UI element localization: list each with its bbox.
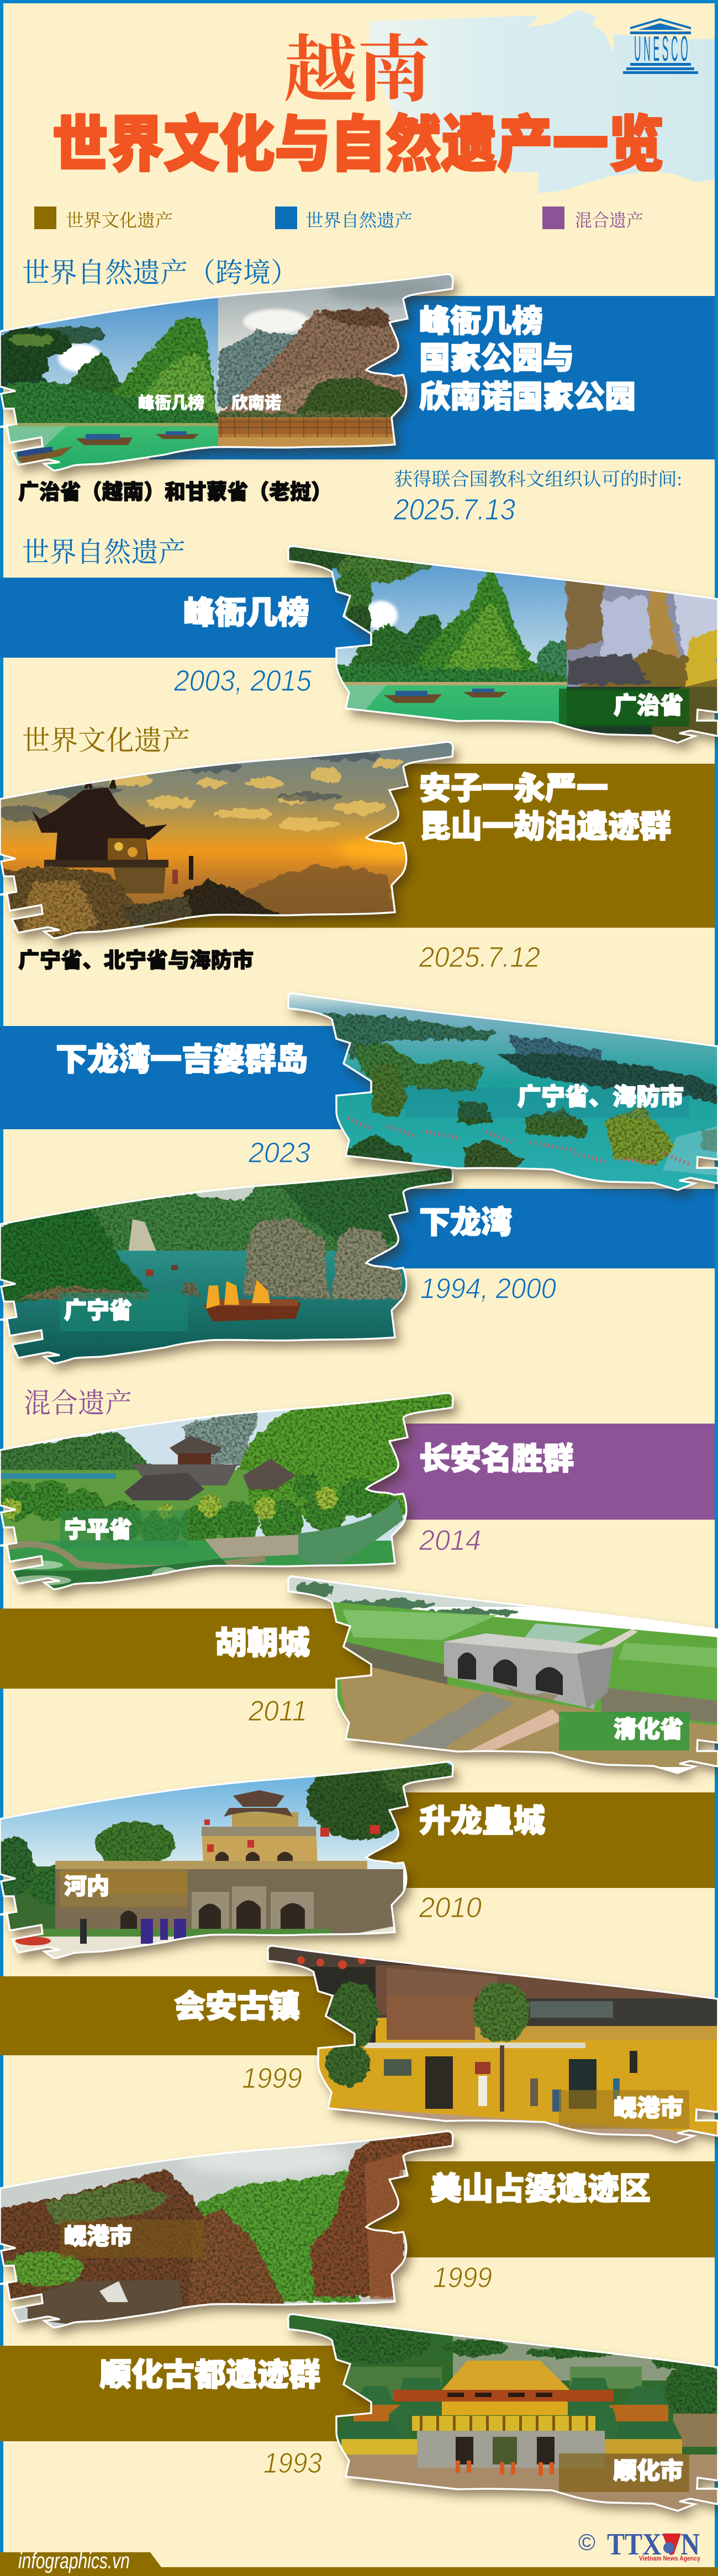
label: Quang Ninh: 广宁省 bbox=[64, 1298, 132, 1323]
label: Quang Ninh, Hai Phong: 广宁省、海防市 bbox=[518, 1084, 684, 1110]
band: purple title band bbox=[353, 1424, 715, 1520]
date: 1993: 1993 bbox=[263, 2447, 322, 2479]
footer bar bbox=[0, 2549, 718, 2576]
photo: aerial of Ha Long and Cat Ba bbox=[284, 991, 718, 1195]
panel: Phong Nha Ke Bang bbox=[0, 544, 718, 748]
band: blue title band bbox=[0, 1026, 381, 1129]
date: 2023: 2023 bbox=[248, 1137, 310, 1169]
band title: Hoi An: 会安古镇 bbox=[174, 1989, 300, 2024]
logo: TTXVN: Vietnam News Agency bbox=[639, 2556, 701, 2562]
band title: Yen Tu: 安子一永严一 bbox=[419, 771, 608, 806]
band title: Phong Nha and Hin Nam No: 国家公园与 bbox=[419, 341, 574, 375]
band title: Trang An: 长安名胜群 bbox=[419, 1441, 574, 1476]
band: brown title band bbox=[0, 1976, 365, 2055]
legend: cultural heritage bbox=[34, 207, 173, 230]
band: brown title band bbox=[353, 1792, 715, 1888]
band title: Yen Tu: 昆山一劫泊遗迹群 bbox=[419, 809, 671, 844]
legend: mixed heritage: 混合遗产 bbox=[575, 210, 643, 230]
photo: Hoi An street bbox=[265, 1943, 718, 2147]
pagoda bbox=[55, 824, 148, 860]
date: 2025.7.13: 2025.7.13 bbox=[393, 493, 515, 526]
panel: Ha Long Bay and Cat Ba bbox=[0, 991, 718, 1195]
date: 2003, 2015: 2003, 2015 bbox=[173, 664, 312, 697]
band title: My Son: 美山占婆遗迹区 bbox=[430, 2171, 651, 2207]
photo: pagoda at sunset bbox=[0, 742, 458, 940]
date: 2014: 2014 bbox=[419, 1525, 481, 1557]
location: Quang Tri and Khammouane: 广治省（越南）和甘蒙省（老挝） bbox=[18, 481, 332, 504]
icon: UNESCO logo bbox=[623, 18, 698, 74]
label: Phong Nha: 峰衙几榜 bbox=[138, 394, 204, 412]
band title: Ho citadel: 胡朝城 bbox=[215, 1626, 310, 1661]
date: 1999: 1999 bbox=[433, 2262, 492, 2294]
label: Hue: 顺化市 bbox=[614, 2458, 683, 2484]
band title: Phong Nha Ke Bang: 峰衙几榜 bbox=[183, 595, 309, 631]
label: Da Nang: 岘港市 bbox=[64, 2224, 132, 2249]
band title: Thang Long: 升龙皇城 bbox=[419, 1803, 545, 1839]
band title: Phong Nha and Hin Nam No: 欣南诺国家公园 bbox=[419, 379, 636, 414]
legend: cultural heritage: 世界文化遗产 bbox=[66, 210, 173, 230]
panel: Citadel of the Ho Dynasty bbox=[0, 1574, 718, 1773]
photo: Ha Long junk boat bbox=[0, 1164, 458, 1367]
legend: natural heritage: 世界自然遗产 bbox=[305, 210, 413, 230]
label: Da Nang: 岘港市 bbox=[614, 2095, 683, 2121]
title: Vietnam: 越南 bbox=[284, 30, 431, 111]
caption: recognition date: 获得联合国教科文组织认可的时间: bbox=[394, 469, 682, 490]
logo: TTXVN: TTXVN bbox=[607, 2527, 700, 2562]
label: Hin Nam No: 欣南诺 bbox=[231, 394, 281, 412]
heading: mixed heritage: 混合遗产 bbox=[24, 1388, 132, 1419]
panel: Complex of Hue Monuments bbox=[0, 2311, 718, 2516]
legend: mixed heritage bbox=[542, 207, 643, 230]
panel: Thang Long Imperial Citadel bbox=[0, 1759, 715, 1960]
heading: transboundary natural heritage: 世界自然遗产（跨境） bbox=[22, 257, 298, 288]
band: brown title band bbox=[0, 1609, 381, 1689]
label: Thanh Hoa: 清化省 bbox=[614, 1716, 683, 1742]
label: Hanoi: 河内 bbox=[64, 1874, 109, 1899]
heading: cultural heritage: 世界文化遗产 bbox=[22, 725, 190, 756]
photo: Hue Noon Gate bbox=[284, 2311, 718, 2516]
photo: Ho citadel gate bbox=[284, 1574, 718, 1773]
date: 2011: 2011 bbox=[248, 1695, 307, 1727]
band: blue title band bbox=[353, 1189, 715, 1268]
pagoda roofs bbox=[170, 1436, 222, 1454]
date: 2010: 2010 bbox=[419, 1892, 482, 1924]
heading: natural heritage: 世界自然遗产 bbox=[22, 537, 186, 568]
photo: Phong Nha cave and river bbox=[276, 544, 718, 748]
band title: Hue: 顺化古都遗迹群 bbox=[100, 2357, 320, 2393]
panel: Yen Tu Vinh Nghiem Con Son Kiep Bac bbox=[0, 742, 715, 940]
photo: Trang An bbox=[0, 1390, 458, 1591]
map silhouette background bbox=[367, 10, 715, 193]
photo: Thang Long citadel bbox=[0, 1759, 458, 1960]
icon: UNESCO logo: UNESCO bbox=[634, 29, 688, 68]
panel: My Son Sanctuary bbox=[0, 2128, 715, 2330]
panel: Ha Long Bay (painted first, overlapped by the Cat Ba panel) bbox=[0, 1164, 715, 1367]
band title: Ha Long Bay and Cat Ba: 下龙湾一吉婆群岛 bbox=[56, 1042, 308, 1077]
band title: Ha Long Bay: 下龙湾 bbox=[419, 1205, 512, 1240]
title: list of world heritage: 世界文化与自然遗产一览 bbox=[52, 111, 664, 179]
band: brown title band bbox=[0, 2346, 381, 2441]
footer site name: infographics.vn bbox=[18, 2549, 130, 2573]
label: Quang Tri: 广治省 bbox=[614, 692, 683, 718]
panel: Hoi An Ancient Town bbox=[0, 1943, 718, 2147]
copyright symbol: © bbox=[578, 2529, 595, 2555]
legend: natural heritage bbox=[275, 207, 413, 230]
date: 2025.7.12: 2025.7.12 bbox=[419, 941, 540, 974]
date: 1999: 1999 bbox=[242, 2062, 302, 2094]
date: 1994, 2000: 1994, 2000 bbox=[420, 1273, 556, 1305]
photo: Phong Nha and Hin Nam No bbox=[0, 274, 456, 476]
location: Quang Ninh, Bac Ninh, Hai Phong: 广宁省、北宁省与海防市 bbox=[18, 949, 254, 972]
band title: Phong Nha and Hin Nam No: 峰衙几榜 bbox=[419, 304, 543, 338]
band: blue title band bbox=[149, 296, 715, 459]
band: brown title band bbox=[144, 764, 715, 928]
gate tower bbox=[202, 1827, 318, 1861]
photo: My Son towers bbox=[0, 2128, 458, 2330]
panel: Trang An bbox=[0, 1390, 715, 1591]
label: Ninh Binh: 宁平省 bbox=[64, 1517, 132, 1542]
band: blue title band bbox=[0, 578, 381, 658]
band: brown title band bbox=[353, 2161, 715, 2257]
panel: Phong Nha and Hin Nam No bbox=[0, 274, 715, 476]
